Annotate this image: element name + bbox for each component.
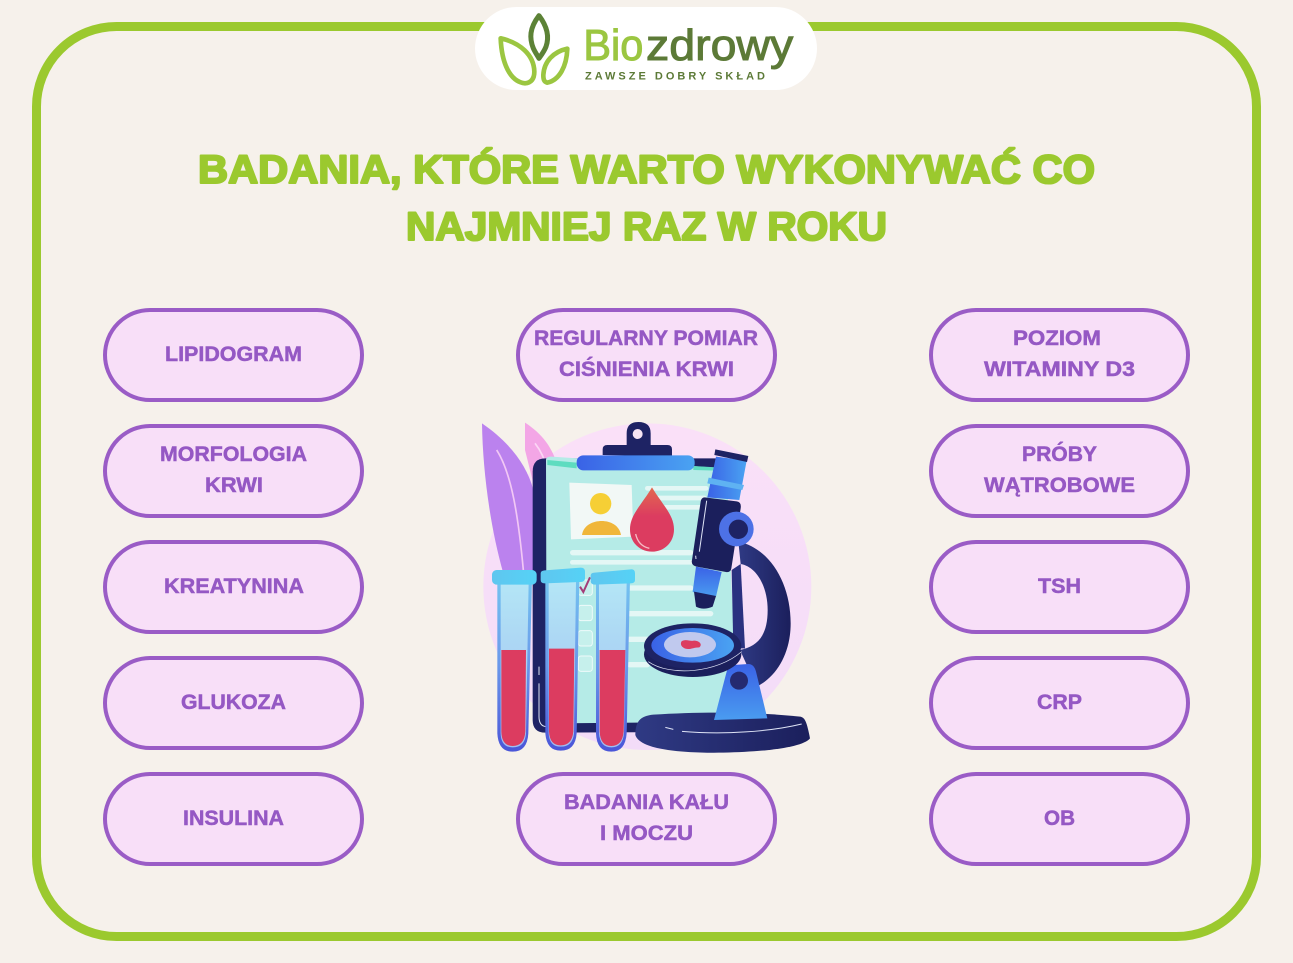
eyepiece tube <box>707 457 747 500</box>
pill: Poziom witaminy D3: POZIOM <box>1013 326 1101 350</box>
pill: OB <box>931 774 1188 864</box>
test tube 1 <box>492 570 537 752</box>
pill: Lipidogram <box>105 310 362 400</box>
clipboard <box>533 422 741 733</box>
clip <box>603 422 672 457</box>
pill: OB: OB <box>1044 806 1075 830</box>
pill: Kreatynina: KREATYNINA <box>164 574 304 598</box>
pill: Próby wątrobowe: PRÓBY <box>1022 441 1097 466</box>
pill: TSH <box>931 542 1188 632</box>
pill: Poziom witaminy D3 <box>931 310 1188 400</box>
pill: CRP: CRP <box>1037 690 1082 714</box>
pill: Badania kału i moczu: BADANIA KAŁU <box>564 790 729 814</box>
wordmark: Bio <box>583 22 643 70</box>
stand <box>714 664 767 720</box>
illustration: laboratory tests <box>482 422 811 753</box>
icon: three leaves <box>501 16 567 83</box>
pill: Badania kału i moczu: I MOCZU <box>600 821 693 845</box>
title: NAJMNIEJ RAZ W ROKU <box>406 205 887 249</box>
pill: Morfologia krwi <box>105 426 362 516</box>
pill: Regularny pomiar ciśnienia krwi: CIŚNIENIA KRWI <box>559 356 734 381</box>
pill: Próby wątrobowe: WĄTROBOWE <box>984 473 1135 497</box>
base <box>635 713 810 753</box>
plant leaves <box>482 423 557 573</box>
title: BADANIA, KTÓRE WARTO WYKONYWAĆ CO <box>198 146 1095 192</box>
pill: Regularny pomiar ciśnienia krwi <box>518 310 775 400</box>
pill: Kreatynina <box>105 542 362 632</box>
microscope body <box>692 497 741 572</box>
objective lens <box>693 567 722 597</box>
pink background circle <box>483 423 811 750</box>
logo: Biozdrowy <box>475 7 817 90</box>
form lines <box>570 486 713 667</box>
pill: Próby wątrobowe <box>931 426 1188 516</box>
pill: Morfologia krwi: MORFOLOGIA <box>160 442 307 466</box>
pill: TSH: TSH <box>1038 574 1081 598</box>
arm <box>738 542 791 687</box>
checkboxes <box>578 580 592 671</box>
title <box>198 146 1095 249</box>
photo card <box>569 483 633 539</box>
focus knob <box>719 512 754 546</box>
pill: Insulina <box>105 774 362 864</box>
pill: Lipidogram: LIPIDOGRAM <box>165 342 302 366</box>
pill: Glukoza <box>105 658 362 748</box>
pill: CRP <box>931 658 1188 748</box>
pill: Morfologia krwi: KRWI <box>205 473 263 497</box>
pill: Badania kału i moczu <box>518 774 775 864</box>
pill: Poziom witaminy D3: WITAMINY D3 <box>984 357 1135 381</box>
tagline: ZAWSZE DOBRY SKŁAD <box>585 70 765 82</box>
pill: Insulina: INSULINA <box>183 806 284 830</box>
test tube 3 <box>591 569 635 752</box>
microscope <box>635 449 810 753</box>
blood drop <box>630 487 674 552</box>
slide stage <box>644 623 742 677</box>
pill: Glukoza: GLUKOZA <box>181 690 286 714</box>
logo: Biozdrowy: zdrowy <box>646 22 794 70</box>
test tube 2 <box>541 568 585 751</box>
pill: Regularny pomiar ciśnienia krwi: REGULARNY POMIAR <box>534 326 758 350</box>
